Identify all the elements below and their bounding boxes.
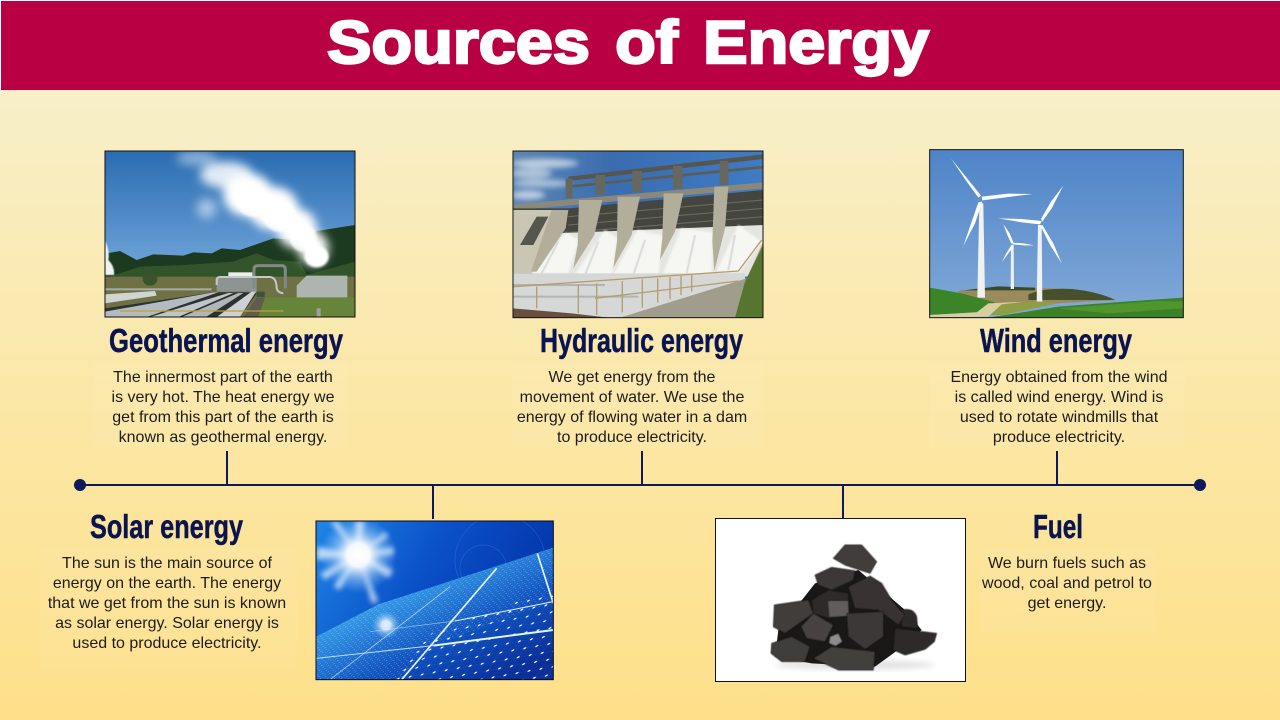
body: fuel: We burn fuels such as [988,555,1146,572]
title banner [1,1,1280,90]
body: wind: Energy obtained from the wind [950,369,1168,386]
body: fuel: wood, coal and petrol to [981,575,1152,592]
photo: wind turbines [930,150,1183,318]
body: hydraulic: to produce electricity. [557,429,707,446]
turbine 1 [951,158,1033,298]
body: fuel: get energy. [1028,595,1106,612]
photo: geothermal plant [105,151,355,317]
body: solar: that we get from the sun is known [48,595,286,612]
body: geothermal: known as geothermal energy. [119,429,327,446]
title: Sources of Energy [327,9,930,76]
heading: solar: Solar energy [90,508,243,545]
body: geothermal [112,369,335,446]
text block: solar [40,508,298,670]
body: hydraulic [517,369,747,446]
heading: hydraulic: Hydraulic energy [540,322,743,359]
photo: solar panels [316,515,553,680]
body: wind: produce electricity. [993,429,1125,446]
heading: fuel: Fuel [1033,508,1083,545]
body: wind [950,369,1168,446]
body: hydraulic: movement of water. We use the [520,389,744,406]
photo: hydraulic dam [512,151,763,318]
heading: geothermal: Geothermal energy [109,322,343,359]
turbine 3 [1002,224,1034,289]
body: wind: is called wind energy. Wind is [955,389,1163,406]
body: geothermal: The innermost part of the earth [113,369,333,386]
body: hydraulic: energy of flowing water in a dam [517,409,747,426]
photo: coal pile [716,518,966,682]
body: geothermal: get from this part of the earth is [112,409,334,426]
body: solar: The sun is the main source of [62,555,272,572]
turbine 2 [998,186,1063,302]
body: solar: as solar energy. Solar energy is [55,615,279,632]
body: wind: used to rotate windmills that [960,409,1159,426]
timeline [74,451,1206,519]
body: hydraulic: We get energy from the [549,369,716,386]
text block: geothermal [93,322,348,448]
text block: wind [930,322,1185,448]
heading: wind: Wind energy [980,322,1132,359]
text block: fuel [980,508,1155,632]
body: solar [48,555,286,652]
body: solar: used to produce electricity. [72,635,262,652]
text block: hydraulic [512,322,764,448]
body: solar: energy on the earth. The energy [53,575,281,592]
body: fuel [981,555,1152,612]
body: geothermal: is very hot. The heat energy we [112,389,335,406]
